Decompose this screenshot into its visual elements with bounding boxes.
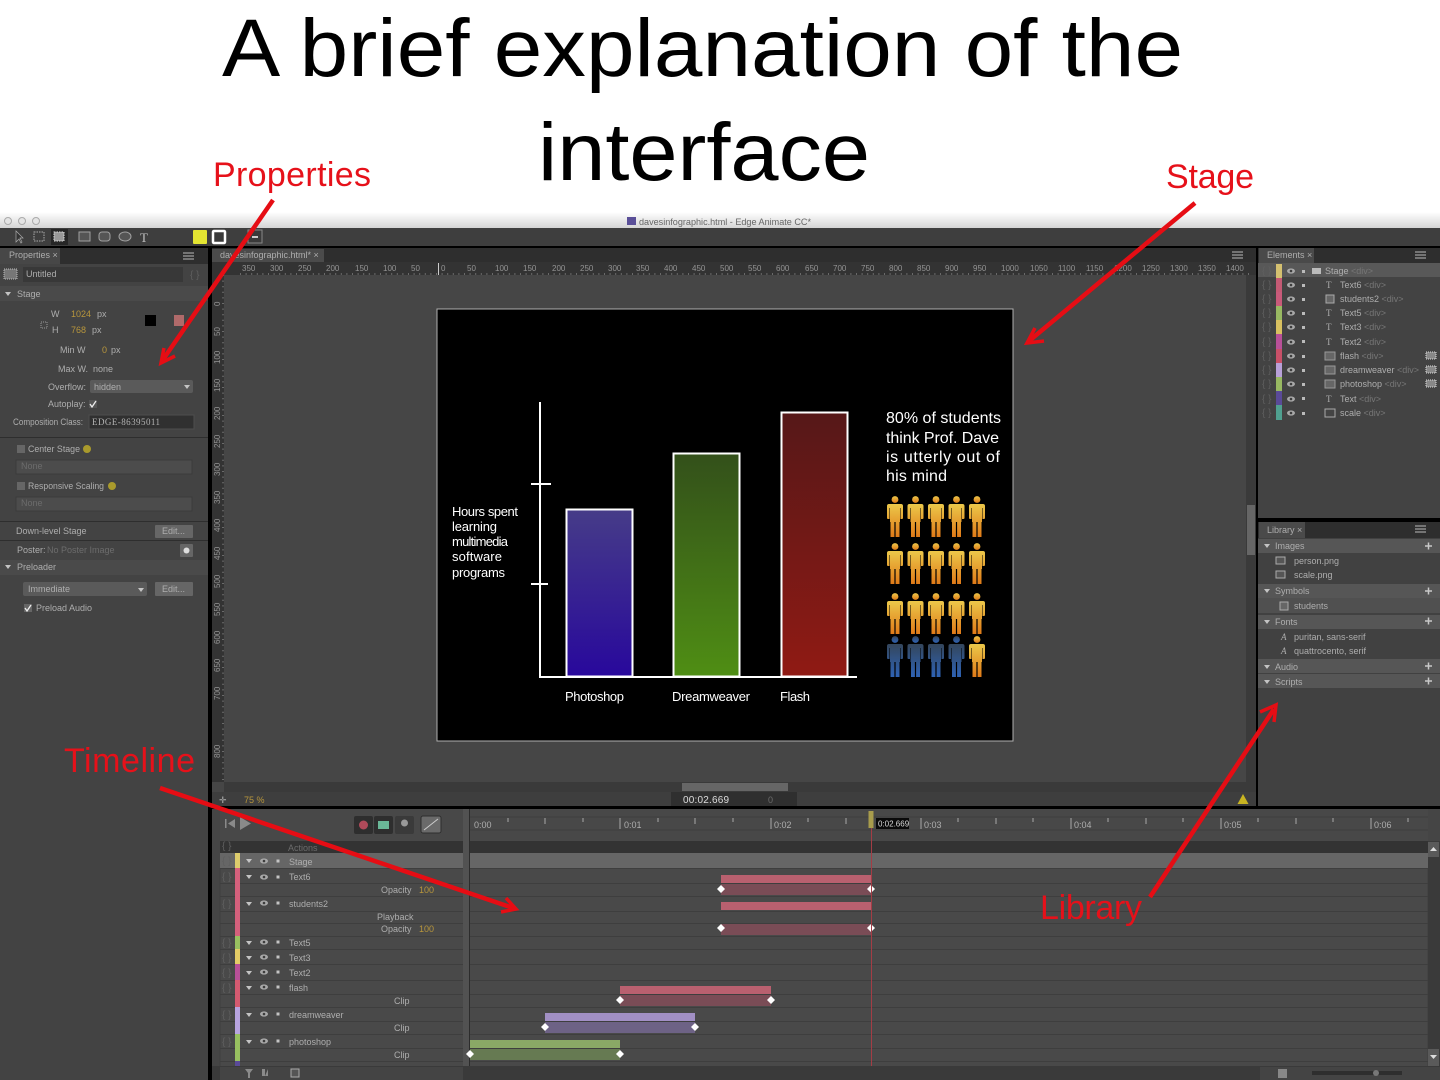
element rows bbox=[1262, 264, 1436, 420]
timeline layer names and properties: { } bbox=[222, 841, 232, 852]
element rows: T bbox=[1326, 322, 1332, 332]
label: stage: Stage bbox=[1166, 158, 1254, 196]
timeline ruler: 0:00 bbox=[474, 820, 492, 830]
vertical ruler: 350 bbox=[213, 490, 222, 504]
horizontal ruler: 1200 bbox=[1114, 264, 1132, 273]
library items: scale.png bbox=[1294, 570, 1333, 580]
section: stage: EDGE-86395011 bbox=[92, 417, 160, 427]
vertical ruler: 700 bbox=[213, 686, 222, 700]
timeline layer names and properties: dreamweaver bbox=[289, 1010, 344, 1020]
stage scrollbars and status bar bbox=[212, 275, 1256, 806]
element rows: students2 <div> bbox=[1340, 294, 1404, 304]
element rows: Stage <div> bbox=[1325, 266, 1373, 276]
playhead bbox=[868, 811, 910, 1066]
bar: flash bbox=[780, 412, 848, 704]
title: interface bbox=[538, 107, 870, 198]
element rows: dreamweaver <div> bbox=[1340, 365, 1419, 375]
section: stage: 768 bbox=[71, 325, 86, 335]
timeline ruler: 0:05 bbox=[1224, 820, 1242, 830]
library section headers: Fonts bbox=[1275, 617, 1298, 627]
title: A brief explanation of the bbox=[222, 3, 1183, 94]
section: center stage and responsive scaling: Responsive Scaling bbox=[28, 481, 104, 491]
element rows: Text6 <div> bbox=[1340, 280, 1386, 290]
timeline layer names and properties: { } bbox=[222, 968, 232, 979]
horizontal ruler: 900 bbox=[945, 264, 959, 273]
vertical ruler: 800 bbox=[213, 744, 222, 758]
bar: photoshop bbox=[565, 510, 632, 704]
library items: students bbox=[1294, 601, 1329, 611]
horizontal ruler: 950 bbox=[973, 264, 987, 273]
library items: puritan, sans-serif bbox=[1294, 632, 1366, 642]
vertical ruler: 600 bbox=[213, 630, 222, 644]
panel: properties: Untitled bbox=[26, 269, 57, 279]
horizontal ruler: 400 bbox=[664, 264, 678, 273]
horizontal ruler: 100 bbox=[383, 264, 397, 273]
arrow: stage bbox=[1027, 203, 1195, 343]
section: stage: none bbox=[93, 364, 113, 374]
clip: flash bbox=[616, 986, 775, 1006]
clip: photoshop bbox=[466, 1040, 624, 1060]
timeline scrollbar bbox=[1428, 841, 1440, 1066]
horizontal ruler: 750 bbox=[861, 264, 875, 273]
window title bar: davesinfographic.html - Edge Animate CC* bbox=[639, 217, 811, 227]
element rows: { } bbox=[1262, 365, 1272, 376]
section: down-level stage and poster: No Poster Image bbox=[47, 545, 115, 555]
vertical ruler: 250 bbox=[213, 434, 222, 448]
element rows: Text2 <div> bbox=[1340, 337, 1386, 347]
library items: A bbox=[1280, 632, 1287, 642]
top toolbar: T bbox=[140, 230, 148, 245]
playhead: 0:02.669 bbox=[878, 820, 910, 828]
timeline layer colour strips bbox=[235, 853, 240, 1066]
statistic text: 80% of students bbox=[886, 410, 1001, 427]
section: stage: px bbox=[97, 309, 107, 319]
element rows: { } bbox=[1262, 351, 1272, 362]
panel: library: Library × bbox=[1267, 525, 1302, 535]
clip: students2 bbox=[717, 902, 875, 935]
timeline layer names and properties: Text3 bbox=[289, 953, 311, 963]
library section headers: Images bbox=[1275, 541, 1305, 551]
section: stage: px bbox=[92, 325, 102, 335]
timeline layer names and properties: Text6 bbox=[289, 872, 311, 882]
horizontal ruler: 350 bbox=[242, 264, 256, 273]
panel: timeline bbox=[212, 809, 1440, 1080]
arrow: timeline bbox=[160, 788, 516, 912]
horizontal ruler: 850 bbox=[917, 264, 931, 273]
horizontal ruler: 650 bbox=[805, 264, 819, 273]
horizontal ruler: 1250 bbox=[1142, 264, 1160, 273]
horizontal ruler: 300 bbox=[608, 264, 622, 273]
vertical ruler: 550 bbox=[213, 602, 222, 616]
horizontal ruler: 450 bbox=[692, 264, 706, 273]
section: preloader: Immediate bbox=[28, 584, 70, 594]
panel: properties: Properties × bbox=[9, 250, 58, 260]
stage scrollbars and status bar: ✛ bbox=[219, 795, 227, 805]
horizontal ruler: 1100 bbox=[1058, 264, 1076, 273]
y-axis label: Hours spent bbox=[452, 504, 518, 519]
section: preloader bbox=[0, 560, 208, 613]
element rows: { } bbox=[1262, 280, 1272, 291]
clip: dreamweaver bbox=[541, 1013, 699, 1033]
statistic text: is utterly out of bbox=[886, 449, 1001, 466]
timeline layer names and properties: Playback bbox=[377, 912, 414, 922]
section: stage: Autoplay: bbox=[48, 399, 86, 409]
horizontal ruler: 150 bbox=[355, 264, 369, 273]
timeline bottom bar bbox=[212, 1066, 1440, 1080]
timeline clips bbox=[466, 875, 875, 1060]
pictogram: people grid bbox=[887, 496, 985, 677]
element rows: { } bbox=[1262, 408, 1272, 419]
timeline ruler: 0:04 bbox=[1074, 820, 1092, 830]
vertical ruler: 400 bbox=[213, 518, 222, 532]
timeline row backgrounds bbox=[220, 868, 1428, 1066]
horizontal ruler: 300 bbox=[270, 264, 284, 273]
vertical ruler: 100 bbox=[213, 350, 222, 364]
y-axis label: multimedia bbox=[452, 534, 509, 549]
horizontal ruler: 50 bbox=[467, 264, 476, 273]
horizontal ruler: 1150 bbox=[1086, 264, 1104, 273]
timeline layer names and properties: { } bbox=[222, 1037, 232, 1048]
horizontal ruler: 200 bbox=[326, 264, 340, 273]
section: stage: hidden bbox=[94, 382, 121, 392]
horizontal ruler: 1050 bbox=[1030, 264, 1048, 273]
element rows: { } bbox=[1262, 294, 1272, 305]
section: stage: Overflow: bbox=[48, 382, 86, 392]
horizontal ruler: 250 bbox=[580, 264, 594, 273]
timeline layer names and properties: Clip bbox=[394, 1023, 410, 1033]
library section headers bbox=[1258, 539, 1440, 688]
element rows: Text3 <div> bbox=[1340, 322, 1386, 332]
timeline layer names and properties: photoshop bbox=[289, 1037, 331, 1047]
section: stage: Stage bbox=[17, 289, 41, 299]
timeline layer names and properties bbox=[222, 841, 434, 1060]
statistic text: his mind bbox=[886, 468, 947, 485]
section: down-level stage and poster: Edit... bbox=[162, 526, 185, 536]
stage scrollbars and status bar: 75 % bbox=[244, 795, 265, 805]
timeline layer names and properties: students2 bbox=[289, 899, 328, 909]
section: center stage and responsive scaling: Center Stage bbox=[28, 444, 80, 454]
element rows: { } bbox=[1262, 394, 1272, 405]
timeline layer names and properties: Stage bbox=[289, 857, 313, 867]
section: down-level stage and poster bbox=[0, 521, 208, 557]
section: stage: W bbox=[51, 309, 60, 319]
timeline layer names and properties: { } bbox=[222, 899, 232, 910]
element rows: T bbox=[1326, 394, 1332, 404]
element rows: { } bbox=[1262, 337, 1272, 348]
element rows: T bbox=[1326, 280, 1332, 290]
chart axes bbox=[531, 402, 857, 678]
section: center stage and responsive scaling: None bbox=[21, 461, 43, 471]
bar: photoshop: Photoshop bbox=[565, 689, 624, 704]
section: stage: Max W. bbox=[58, 364, 88, 374]
library section headers: Scripts bbox=[1275, 677, 1303, 687]
panel: properties bbox=[0, 248, 208, 1080]
panel: timeline: Actions bbox=[288, 843, 318, 853]
label: timeline: Timeline bbox=[64, 742, 195, 780]
statistic text: think Prof. Dave bbox=[886, 430, 999, 447]
horizontal ruler: 1000 bbox=[1001, 264, 1019, 273]
element rows: { } bbox=[1262, 308, 1272, 319]
element rows: { } bbox=[1262, 322, 1272, 333]
panel: elements: Elements × bbox=[1267, 250, 1312, 260]
section: stage: Composition Class: bbox=[13, 417, 83, 427]
element rows: { } bbox=[1262, 379, 1272, 390]
section: stage: 0 bbox=[102, 345, 107, 355]
section: stage bbox=[0, 286, 208, 429]
element rows: { } bbox=[1262, 266, 1272, 277]
vertical ruler: 650 bbox=[213, 658, 222, 672]
horizontal ruler: 0 bbox=[441, 264, 446, 273]
element rows: flash <div> bbox=[1340, 351, 1384, 361]
horizontal ruler: 600 bbox=[776, 264, 790, 273]
top toolbar bbox=[0, 228, 1440, 246]
vertical ruler: 0 bbox=[213, 301, 222, 306]
timeline layer names and properties: Opacity bbox=[381, 924, 412, 934]
timeline layer names and properties: { } bbox=[222, 953, 232, 964]
stage scrollbars and status bar: 00:02.669 bbox=[683, 795, 729, 806]
library items bbox=[1276, 556, 1367, 656]
title bbox=[222, 3, 1183, 198]
element rows: Text <div> bbox=[1340, 394, 1381, 404]
section: stage: Min W bbox=[60, 345, 86, 355]
timeline layer names and properties: Opacity bbox=[381, 885, 412, 895]
horizontal ruler bbox=[212, 262, 1256, 275]
composition: black stage with infographic bbox=[437, 309, 1013, 741]
section: stage: px bbox=[111, 345, 121, 355]
timeline layer names and properties: { } bbox=[222, 938, 232, 949]
label: properties: Properties bbox=[213, 156, 371, 194]
timeline ruler: 0:06 bbox=[1374, 820, 1392, 830]
section: down-level stage and poster: Poster: bbox=[17, 545, 46, 555]
horizontal ruler: 200 bbox=[552, 264, 566, 273]
library section headers: Symbols bbox=[1275, 586, 1310, 596]
timeline layer names and properties: 100 bbox=[419, 885, 434, 895]
timeline layer names and properties: 100 bbox=[419, 924, 434, 934]
timeline layer names and properties: Text2 bbox=[289, 968, 311, 978]
section: down-level stage and poster: Down-level Stage bbox=[16, 526, 87, 536]
horizontal ruler: 100 bbox=[495, 264, 509, 273]
panel: stage: davesinfographic.html* × bbox=[220, 250, 319, 260]
vertical ruler: 300 bbox=[213, 462, 222, 476]
arrow: library bbox=[1150, 705, 1276, 897]
horizontal ruler: 700 bbox=[833, 264, 847, 273]
horizontal ruler: 350 bbox=[636, 264, 650, 273]
horizontal ruler: 50 bbox=[411, 264, 420, 273]
y-axis label: programs bbox=[452, 565, 506, 580]
label: library: Library bbox=[1040, 889, 1142, 927]
section: preloader: Preloader bbox=[17, 562, 56, 572]
horizontal ruler: 800 bbox=[889, 264, 903, 273]
stage scrollbars and status bar: 0 bbox=[768, 795, 773, 805]
section: preloader: Preload Audio bbox=[36, 603, 92, 613]
vertical ruler: 450 bbox=[213, 546, 222, 560]
horizontal ruler: 250 bbox=[298, 264, 312, 273]
y-axis label bbox=[452, 504, 518, 580]
clip: text6 bbox=[717, 875, 875, 895]
y-axis label: learning bbox=[452, 519, 497, 534]
element rows: T bbox=[1326, 308, 1332, 318]
horizontal ruler: 1300 bbox=[1170, 264, 1188, 273]
section: center stage and responsive scaling bbox=[16, 444, 192, 511]
section: center stage and responsive scaling: None bbox=[21, 498, 43, 508]
horizontal ruler: 1400 bbox=[1226, 264, 1244, 273]
element rows: Text5 <div> bbox=[1340, 308, 1386, 318]
horizontal ruler: 500 bbox=[720, 264, 734, 273]
statistic text bbox=[886, 410, 1001, 485]
bar: flash: Flash bbox=[780, 689, 810, 704]
vertical ruler: 200 bbox=[213, 406, 222, 420]
horizontal ruler: 150 bbox=[523, 264, 537, 273]
panel: elements bbox=[1258, 248, 1440, 518]
panel: properties: { } bbox=[190, 270, 200, 281]
timeline layer names and properties: { } bbox=[222, 856, 232, 867]
library section headers: Audio bbox=[1275, 662, 1298, 672]
timeline ruler bbox=[470, 809, 1428, 841]
timeline ruler: 0:02 bbox=[774, 820, 792, 830]
timeline layer names and properties: { } bbox=[222, 1010, 232, 1021]
timeline ruler: 0:03 bbox=[924, 820, 942, 830]
vertical ruler: 500 bbox=[213, 574, 222, 588]
bar: dreamweaver: Dreamweaver bbox=[672, 689, 751, 704]
section: preloader: Edit... bbox=[162, 584, 185, 594]
section: stage: H bbox=[52, 325, 58, 335]
library items: person.png bbox=[1294, 556, 1339, 566]
arrow: properties bbox=[161, 200, 273, 363]
horizontal ruler: 1350 bbox=[1198, 264, 1216, 273]
vertical ruler: 150 bbox=[213, 378, 222, 392]
y-axis label: software bbox=[452, 549, 502, 564]
library items: A bbox=[1280, 646, 1287, 656]
timeline layer names and properties: { } bbox=[222, 872, 232, 883]
horizontal ruler: 550 bbox=[748, 264, 762, 273]
panel: stage bbox=[212, 248, 1256, 806]
element rows: T bbox=[1326, 337, 1332, 347]
timeline layer names and properties: { } bbox=[222, 983, 232, 994]
timeline ruler: 0:01 bbox=[624, 820, 642, 830]
timeline layer names and properties: Clip bbox=[394, 996, 410, 1006]
timeline layer names and properties: flash bbox=[289, 983, 308, 993]
vertical ruler bbox=[212, 275, 224, 782]
bar: dreamweaver bbox=[672, 454, 751, 704]
panel: library bbox=[1258, 522, 1440, 806]
timeline layer names and properties: Text5 bbox=[289, 938, 311, 948]
vertical ruler: 50 bbox=[213, 327, 222, 336]
timeline transport controls bbox=[220, 809, 463, 841]
element rows: scale <div> bbox=[1340, 408, 1386, 418]
timeline layer names and properties: Clip bbox=[394, 1050, 410, 1060]
section: stage: 1024 bbox=[71, 309, 91, 319]
library items: quattrocento, serif bbox=[1294, 646, 1367, 656]
window title bar bbox=[0, 212, 1440, 228]
element rows: photoshop <div> bbox=[1340, 379, 1407, 389]
